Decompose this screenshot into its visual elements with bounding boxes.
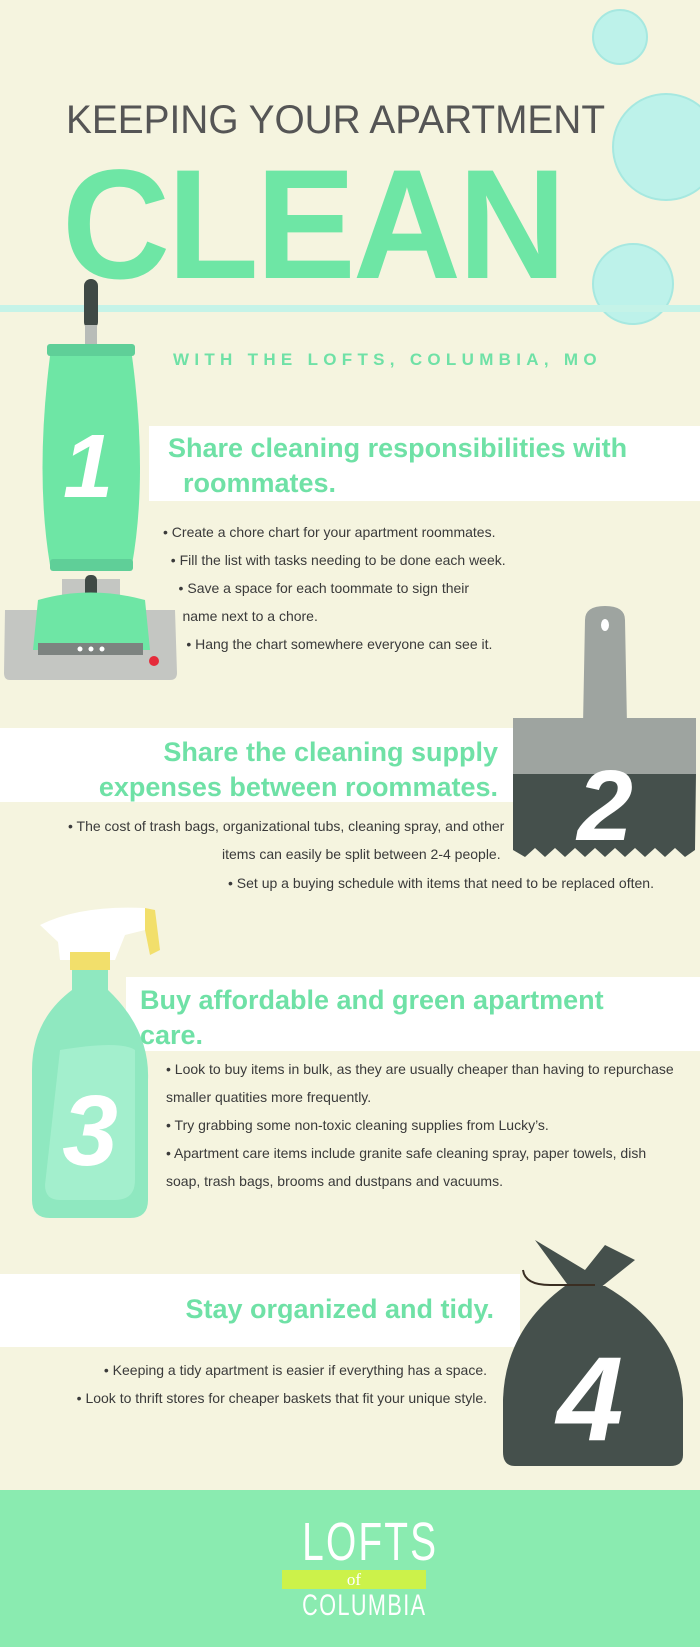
logo: of: [347, 1570, 361, 1589]
icon: spray bottle: [32, 908, 160, 1218]
heading 1: [168, 433, 627, 498]
text: • Set up a buying schedule with items that need to be replaced often.: [228, 875, 654, 891]
heading 4: Stay organized and tidy.: [185, 1294, 494, 1324]
icon: brush: 2: [575, 750, 633, 860]
icon: trash bag: 4: [555, 1332, 623, 1466]
bullets 3: smaller quatities more frequently.: [166, 1089, 371, 1105]
title: KEEPING YOUR APARTMENT: [66, 98, 605, 142]
logo: LOFTS: [302, 1512, 438, 1572]
bullets 1: [163, 524, 506, 652]
bullets 1: • Hang the chart somewhere everyone can see it.: [186, 636, 492, 652]
heading 1: Share cleaning responsibilities with: [168, 433, 627, 463]
section 2 band: [0, 728, 515, 802]
bullets 1: name next to a chore.: [182, 608, 318, 624]
bubbles: [0, 9, 700, 325]
logo: COLUMBIA: [302, 1589, 427, 1622]
heading 2: Share the cleaning supply: [163, 737, 498, 767]
heading: CLEAN: CLEAN: [62, 138, 563, 312]
icon: brush: [513, 606, 696, 860]
icon: vacuum: [4, 279, 177, 680]
section 4 band: [0, 1274, 520, 1347]
text: items can easily be split between 2-4 people.: [222, 846, 501, 862]
heading 2: expenses between roommates.: [99, 772, 498, 802]
footer: [0, 1490, 700, 1647]
icon: trash bag: [503, 1240, 683, 1466]
bullets 1: • Create a chore chart for your apartment roommates.: [163, 524, 496, 540]
heading 3: Buy affordable and green apartment: [140, 985, 604, 1015]
logo: [282, 1512, 438, 1622]
bullets 3: • Look to buy items in bulk, as they are usually cheaper than having to repurchase: [166, 1061, 674, 1077]
heading 3: care.: [140, 1020, 203, 1050]
bullets 1: • Save a space for each toommate to sign their: [179, 580, 469, 596]
icon: spray bottle: 3: [62, 1075, 118, 1187]
heading 1: roommates.: [183, 468, 336, 498]
bullets 2: • The cost of trash bags, organizational tubs, cleaning spray, and other: [68, 818, 504, 834]
bullets 4: [77, 1362, 487, 1406]
bullets 3: soap, trash bags, brooms and dustpans and vacuums.: [166, 1173, 503, 1189]
heading 3: [140, 985, 604, 1050]
bullets 3: • Apartment care items include granite safe cleaning spray, paper towels, dish: [166, 1145, 646, 1161]
bullets 4: • Keeping a tidy apartment is easier if everything has a space.: [104, 1362, 487, 1378]
section 1 band: [149, 426, 700, 501]
bullets 4: • Look to thrift stores for cheaper baskets that fit your unique style.: [77, 1390, 487, 1406]
subtitle: WITH THE LOFTS, COLUMBIA, MO: [173, 350, 602, 369]
icon: vacuum: 1: [63, 417, 113, 517]
section 3 band: [126, 977, 700, 1051]
bullets 1: • Fill the list with tasks needing to be done each week.: [171, 552, 506, 568]
heading 2: [99, 737, 498, 802]
bullets 3: • Try grabbing some non-toxic cleaning supplies from Lucky’s.: [166, 1117, 549, 1133]
bullets 3: [166, 1061, 674, 1189]
